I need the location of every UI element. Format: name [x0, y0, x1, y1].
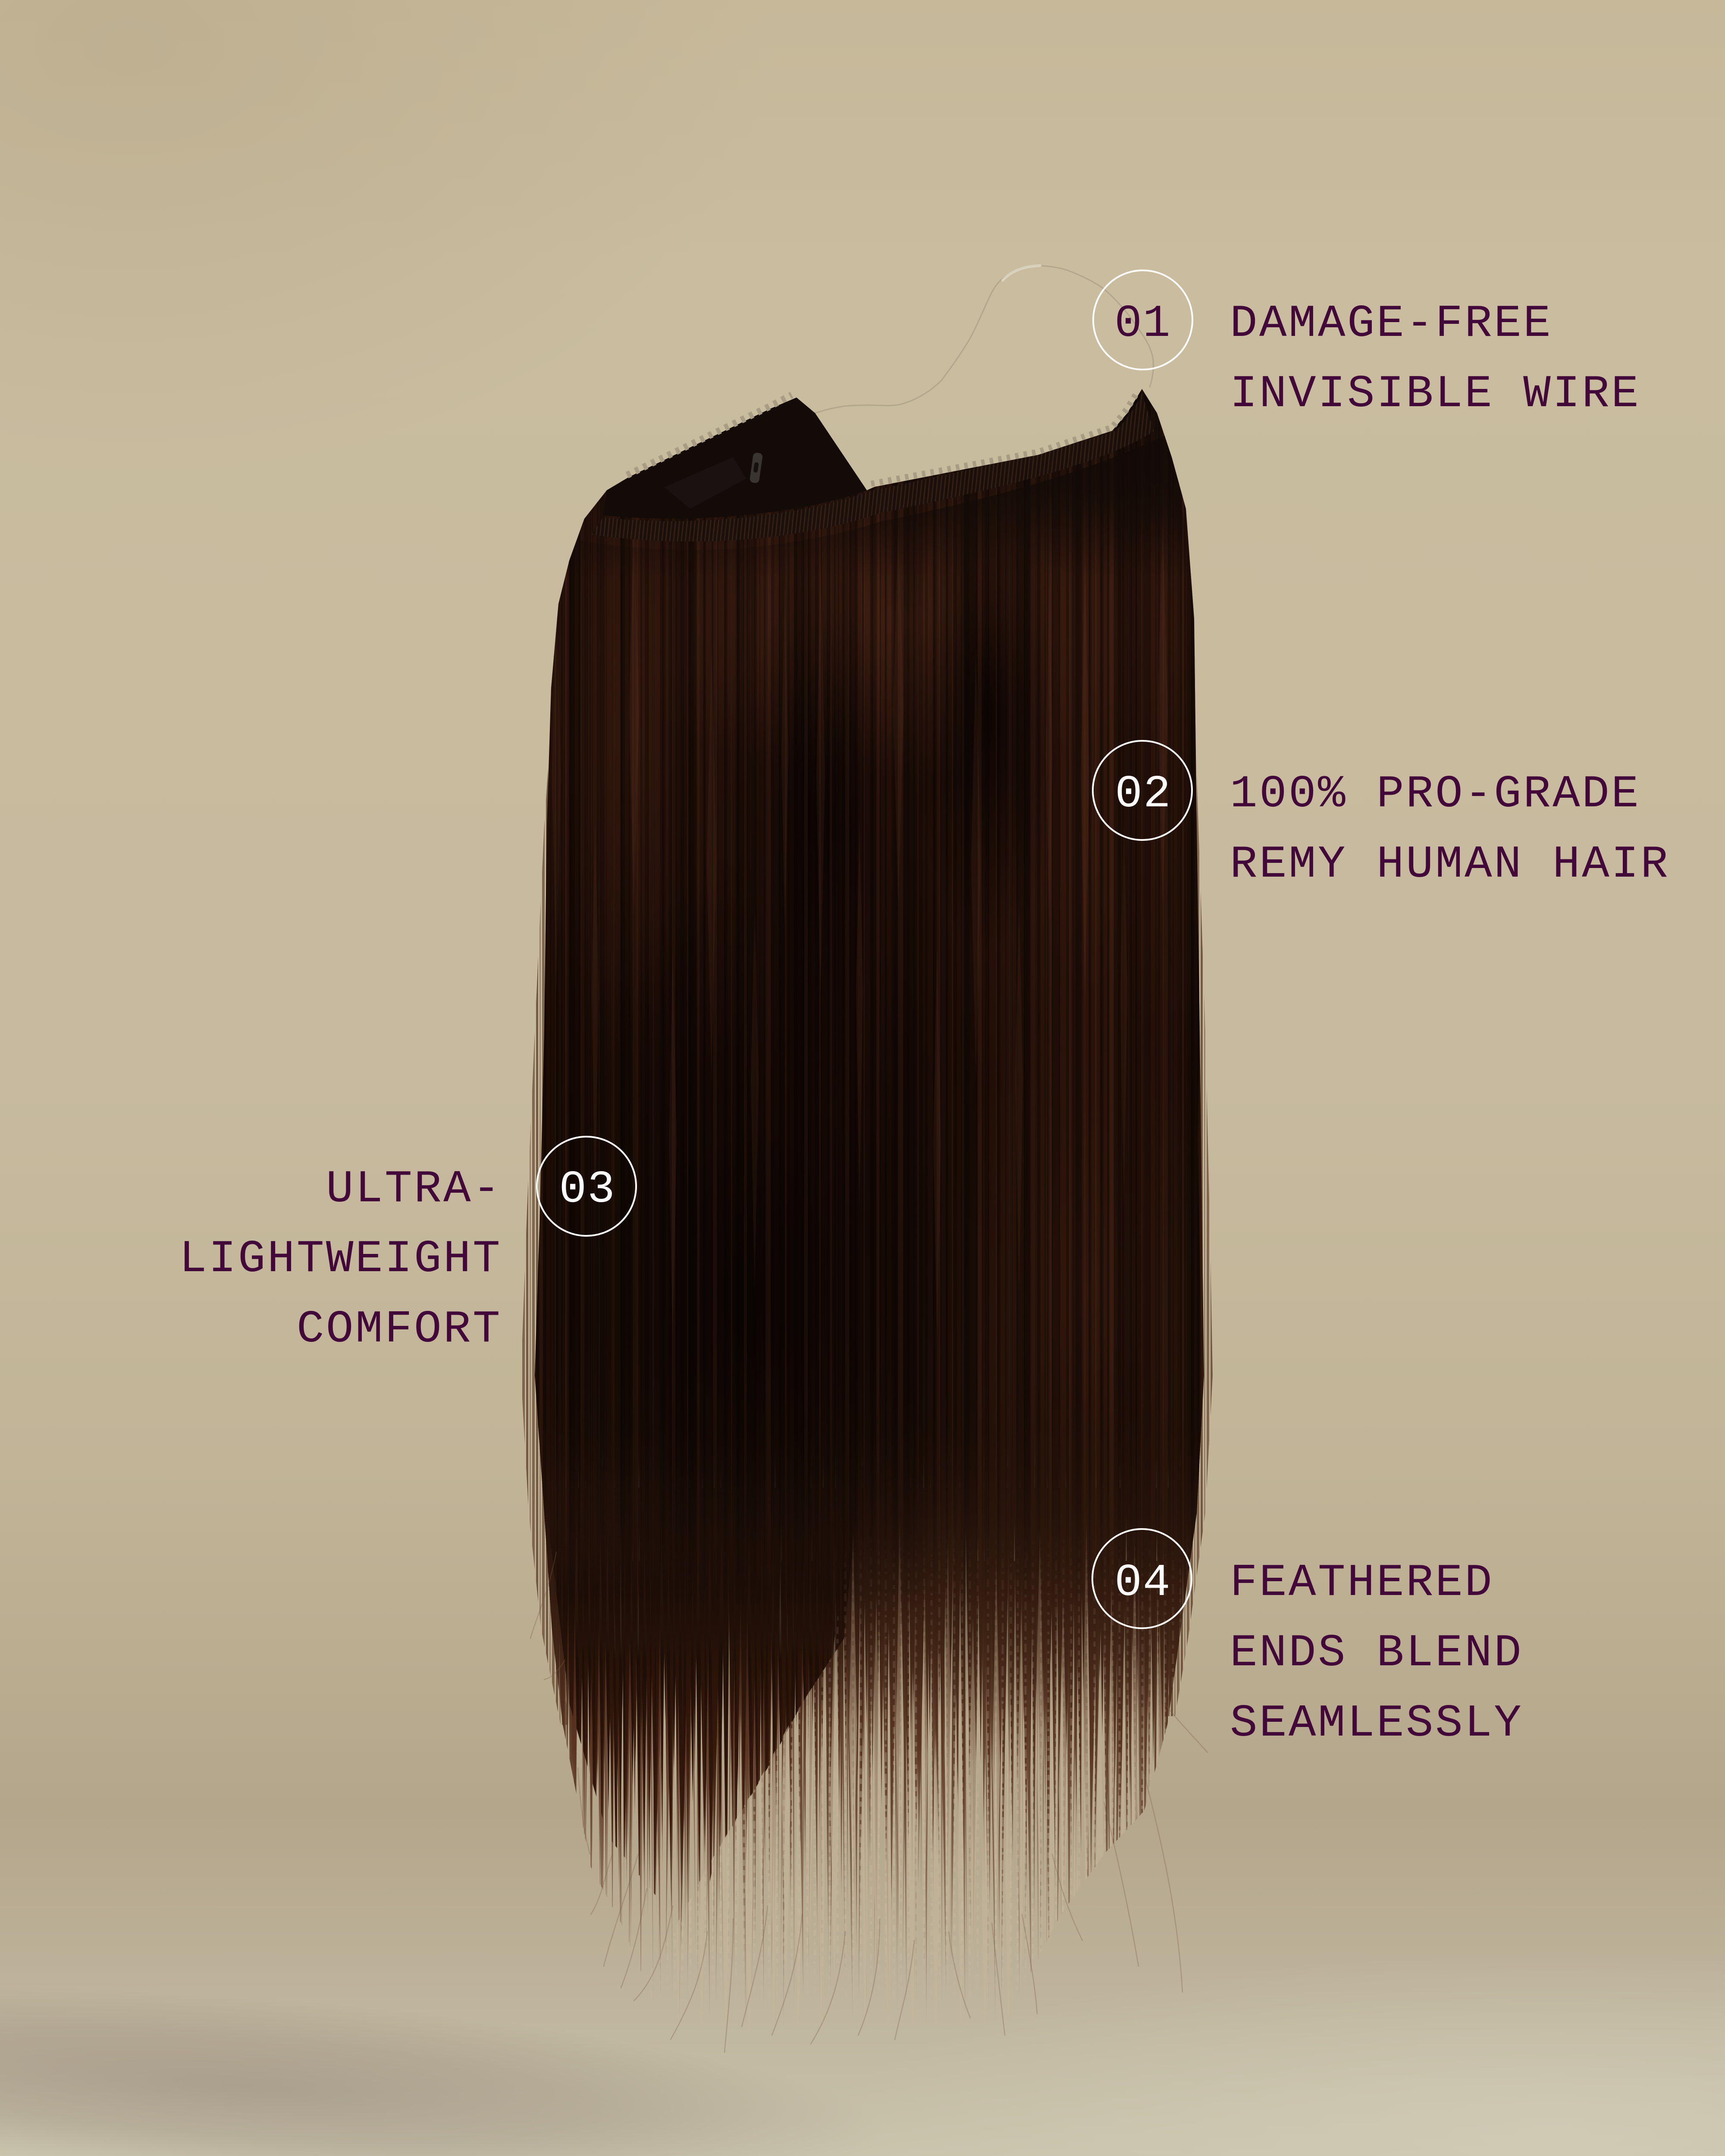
wire: invisible filament [815, 266, 1154, 413]
weft band [592, 393, 1154, 542]
label 03: LIGHTWEIGHT [179, 1233, 502, 1285]
label 04: FEATHERED [1230, 1557, 1494, 1609]
folded inner flap [603, 398, 867, 519]
label 04: ENDS BLEND [1230, 1627, 1523, 1679]
label 01: DAMAGE-FREE [1230, 298, 1552, 350]
wire beads [627, 392, 1138, 484]
callout 03 [179, 1137, 636, 1355]
hair body [535, 389, 1204, 2020]
hair extension [496, 266, 1259, 2053]
label 02: 100% PRO-GRADE [1230, 768, 1640, 820]
light strands in the ends [604, 1488, 1208, 2048]
marker 01: 01 [1114, 298, 1171, 350]
marker 02 [1093, 741, 1192, 840]
flap clip [664, 452, 763, 509]
marker 03: 03 [559, 1164, 616, 1216]
weft band shadow [569, 431, 1190, 578]
flyaway hair tips [530, 1552, 1208, 2053]
label 01: INVISIBLE WIRE [1230, 368, 1640, 420]
marker 04: 04 [1114, 1557, 1171, 1609]
dark tongue of lengths [539, 1488, 862, 1984]
strand striations [496, 367, 1229, 1617]
callout 04 [1092, 1529, 1523, 1749]
side fringe strands [521, 647, 1213, 1725]
marker 02: 02 [1115, 768, 1172, 820]
hair tone regions [513, 367, 1259, 1725]
marker 04 [1092, 1529, 1192, 1628]
label 04: SEAMLESSLY [1230, 1698, 1523, 1749]
marker 03 [537, 1137, 636, 1236]
marker 01 [1093, 270, 1192, 370]
label 02: REMY HUMAN HAIR [1230, 839, 1670, 890]
callout 01 [1093, 270, 1640, 420]
main hair mass [535, 389, 1204, 1712]
feathered strands [538, 1423, 1201, 2020]
label 03: COMFORT [297, 1304, 502, 1355]
callout 02 [1093, 741, 1670, 890]
label 03: ULTRA- [326, 1163, 502, 1215]
